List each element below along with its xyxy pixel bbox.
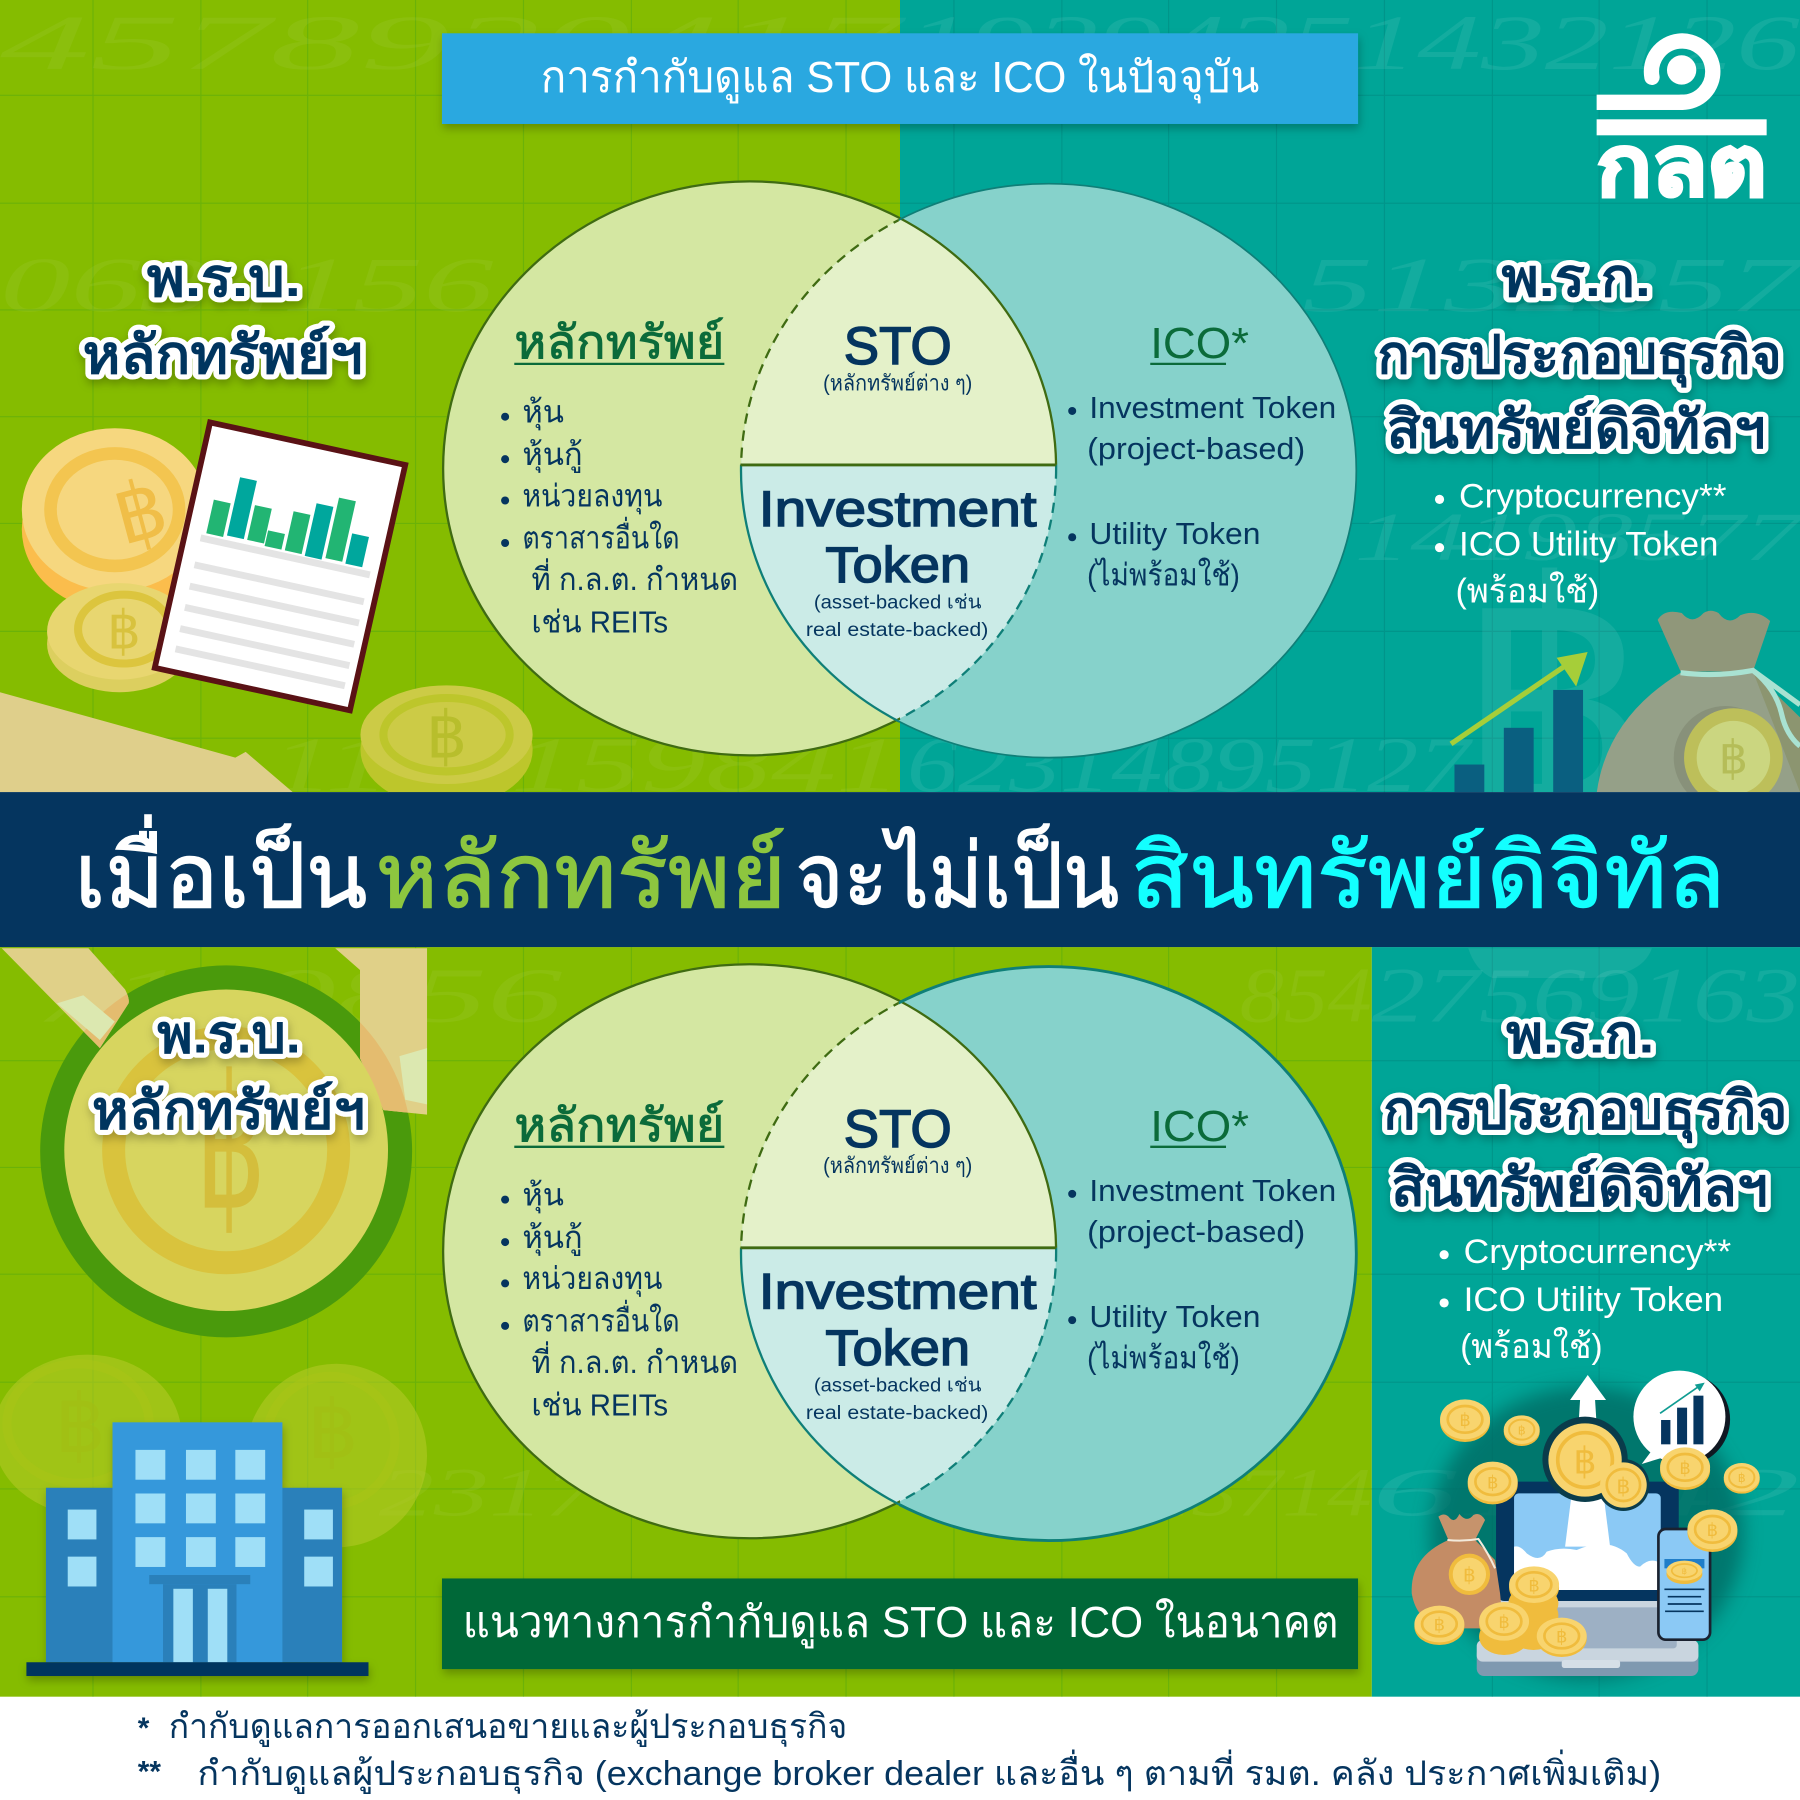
statute title: securities act (top): พ.ร.บ. <box>147 249 301 308</box>
label: investment token <box>759 480 1037 641</box>
illustration: hands holding coin <box>2 948 427 1115</box>
coins: ฿ <box>1616 1473 1630 1498</box>
label: investment token: real estate-backed) <box>806 1402 988 1424</box>
label: investment token: (asset-backed เช่น <box>814 1374 982 1396</box>
coins: ฿ <box>1682 1566 1688 1576</box>
panel: current regulation background: 0634156 <box>0 241 494 328</box>
panel: future regulation background: 61742 <box>1372 1454 1800 1530</box>
icon: big coin face behind statute title: ฿ <box>195 1042 266 1247</box>
statute title: securities act (bottom): หลักทรัพย์ฯ <box>92 1081 365 1140</box>
list: ICO <box>1068 390 1336 592</box>
panel: future regulation background <box>0 947 1800 1697</box>
list: digital asset types (top) <box>1435 477 1727 611</box>
label: STO <box>823 1100 972 1178</box>
banner: key message: เมื่อเป็น <box>75 815 367 926</box>
list: digital asset types (top): (พร้อมใช้) <box>1456 572 1599 611</box>
shadow behind illustration <box>1430 1387 1743 1680</box>
label: investment token: Investment <box>759 480 1037 537</box>
list: ICO: Utility Token <box>1089 516 1260 551</box>
list: digital asset types (bottom): ICO Utility Token <box>1464 1281 1723 1319</box>
list: securities <box>501 1177 738 1422</box>
icon: large coin: ฿ <box>104 462 177 563</box>
label: investment token: real estate-backed) <box>806 619 988 641</box>
heading: current regulation: การกำกับดูแล STO และ ICO ในปัจจุบัน <box>541 52 1259 104</box>
panel: current regulation background: 4578920417 <box>0 0 907 86</box>
label: investment token: Token <box>825 536 970 593</box>
list: securities: หุ้น <box>522 1177 564 1214</box>
coins: ฿ <box>1556 1627 1567 1647</box>
coins: ฿ <box>1459 1410 1471 1430</box>
list: securities: ที่ ก.ล.ต. กำหนด <box>532 558 738 597</box>
coins: ฿ <box>1528 1575 1540 1595</box>
panel: future regulation background: 854 <box>1240 952 1372 1039</box>
icon: faded coin bottom <box>360 685 533 807</box>
label: STO <box>823 317 972 395</box>
icon: money bag with chart arrow <box>1451 611 1800 809</box>
money bag <box>1412 1514 1503 1628</box>
panel: current regulation background: ฿ <box>1456 525 1653 872</box>
panel: current regulation background: 1141159841 <box>270 721 901 808</box>
list: ICO: (project-based) <box>1087 1214 1305 1249</box>
list: ICO: (ไม่พร้อมใช้) <box>1087 1340 1240 1375</box>
list: ICO: Investment Token <box>1089 390 1336 425</box>
statute title: digital asset decree (bottom) <box>1383 1006 1787 1217</box>
list: ICO: (project-based) <box>1087 431 1305 466</box>
panel: current regulation background: 14198577 <box>1355 499 1800 575</box>
coins: ฿ <box>1487 1472 1498 1492</box>
logo: SEC Thailand: กลต <box>1597 119 1767 213</box>
coins: ฿ <box>1434 1615 1445 1635</box>
list: ICO: Utility Token <box>1089 1299 1260 1334</box>
label: STO: STO <box>844 317 952 376</box>
coins: ฿ <box>1707 1520 1718 1540</box>
icon: large coin <box>22 428 208 611</box>
icon: money bag with chart arrow: ฿ <box>1719 732 1748 784</box>
icon: faded coins lower left: ฿ <box>55 1380 106 1470</box>
coins <box>1414 1399 1760 1657</box>
statute title: securities act (bottom) <box>92 1006 365 1140</box>
statute title: digital asset decree (top): พ.ร.ก. <box>1502 249 1651 308</box>
label: investment token: Investment <box>759 1263 1037 1320</box>
coins: ฿ <box>1738 1471 1746 1485</box>
statute title: securities act (top) <box>83 249 363 385</box>
heading: current regulation <box>442 33 1358 124</box>
icon: document with bar chart <box>155 422 405 710</box>
rocket arrow <box>1570 1375 1606 1418</box>
label: STO: (หลักทรัพย์ต่าง ๆ) <box>823 1153 972 1178</box>
panel: current regulation background: 5132857 <box>1302 241 1800 328</box>
footnote: second: ** <box>138 1756 161 1789</box>
panel: future regulation background: 27569163 <box>1372 952 1800 1039</box>
icon: faded coin bottom: ฿ <box>426 700 467 772</box>
coins: ฿ <box>1498 1612 1510 1632</box>
list: securities: หุ้นกู้ <box>522 1220 583 1257</box>
icon: faded coins lower left <box>0 1355 427 1547</box>
icon: faded coins lower left: ฿ <box>307 1386 358 1476</box>
statute title: digital asset decree (top) <box>1378 249 1782 460</box>
list: ICO: (ไม่พร้อมใช้) <box>1087 557 1240 592</box>
list: digital asset types (bottom): Cryptocurrency** <box>1464 1233 1731 1271</box>
list: digital asset types (bottom): (พร้อมใช้) <box>1460 1327 1603 1366</box>
list: digital asset types (bottom) <box>1440 1233 1731 1366</box>
venn diagram: current <box>443 161 1356 769</box>
icon: office building <box>26 1422 368 1676</box>
list: securities <box>501 394 738 640</box>
list: securities: ตราสารอื่นใด <box>522 517 680 556</box>
coins: ฿ <box>1518 1423 1526 1437</box>
laptop <box>1477 1482 1698 1676</box>
list: securities: หุ้น <box>522 394 564 431</box>
statute title: digital asset decree (bottom): สินทรัพย์ดิจิทัลฯ <box>1391 1158 1768 1217</box>
list: digital asset types (top): Cryptocurrency** <box>1459 477 1727 515</box>
footnote: first: กำกับดูแลการออกเสนอขายและผู้ประกอบธุรกิจ <box>169 1708 847 1747</box>
label: STO: (หลักทรัพย์ต่าง ๆ) <box>823 370 972 395</box>
banner: key message: หลักทรัพย์ <box>375 826 786 926</box>
panel: current regulation background <box>0 0 1800 872</box>
coins: ฿ <box>1679 1458 1691 1478</box>
icon: small coin behind document: ฿ <box>107 602 141 661</box>
panel: future regulation background: 23174 <box>379 1454 654 1530</box>
list: securities: ตราสารอื่นใด <box>522 1300 680 1339</box>
panel: current regulation background: 19294251432126 <box>907 0 1800 86</box>
list: digital asset types (top): ICO Utility Token <box>1459 526 1718 564</box>
heading: securities: หลักทรัพย์ <box>514 1099 724 1151</box>
statute title: securities act (top): หลักทรัพย์ฯ <box>83 326 363 385</box>
icon: big coin ring behind statute title <box>40 965 412 1337</box>
footnote: second: กำกับดูแลผู้ประกอบธุรกิจ (exchange broker dealer และอื่น ๆ ตามที่ รมต. คลัง ประกาศเพิ่มเติม) <box>197 1749 1661 1794</box>
coins: ฿ <box>1573 1440 1597 1481</box>
label: investment token <box>759 1263 1037 1424</box>
list: securities: เช่น REITs <box>532 1387 668 1422</box>
list: securities: หน่วยลงทุน <box>522 1261 662 1298</box>
list: ICO: Investment Token <box>1089 1173 1336 1208</box>
phone <box>1658 1529 1710 1640</box>
logo: SEC Thailand <box>1597 41 1767 213</box>
heading: ICO: ICO* <box>1150 320 1249 368</box>
statute title: digital asset decree (bottom): พ.ร.ก. <box>1506 1006 1654 1065</box>
label: investment token: (asset-backed เช่น <box>814 591 982 613</box>
list: securities: หน่วยลงทุน <box>522 478 662 515</box>
icon: small coin behind document <box>47 583 192 692</box>
venn diagram: future <box>443 944 1356 1552</box>
heading: future regulation <box>442 1578 1358 1669</box>
statute title: securities act (bottom): พ.ร.บ. <box>157 1006 301 1065</box>
banner: key message <box>0 792 1800 947</box>
statute title: digital asset decree (top): สินทรัพย์ดิจิทัลฯ <box>1387 401 1766 460</box>
speech bubble chart <box>1633 1371 1730 1465</box>
list: securities: เช่น REITs <box>532 605 668 640</box>
panel: future regulation background: 7129856 <box>34 952 563 1039</box>
list: securities: ที่ ก.ล.ต. กำหนด <box>532 1341 738 1380</box>
panel: future regulation background: 13714 <box>1148 1454 1372 1530</box>
illustration: tan envelope corner <box>0 692 293 792</box>
list: securities: หุ้นกู้ <box>522 437 583 474</box>
banner: key message: สินทรัพย์ดิจิทัล <box>1131 826 1725 926</box>
illustration: laptop rocket and coins <box>1412 1371 1760 1680</box>
coins: ฿ <box>1463 1565 1476 1587</box>
heading: securities: หลักทรัพย์ <box>514 316 724 368</box>
statute title: digital asset decree (bottom): การประกอบธุรกิจ <box>1383 1081 1787 1143</box>
label: STO: STO <box>844 1100 952 1159</box>
panel: current regulation background: 62314895127 <box>907 721 1473 808</box>
footnote: first: * <box>138 1712 150 1745</box>
heading: future regulation: แนวทางการกำกับดูแล STO และ ICO ในอนาคต <box>463 1597 1339 1649</box>
icon: big coin face behind statute title <box>64 990 388 1311</box>
label: investment token: Token <box>825 1319 970 1376</box>
statute title: digital asset decree (top): การประกอบธุรกิจ <box>1378 326 1782 388</box>
heading: ICO: ICO* <box>1150 1103 1249 1151</box>
banner: key message: จะไม่เป็น <box>796 823 1119 926</box>
list: ICO <box>1068 1173 1336 1375</box>
